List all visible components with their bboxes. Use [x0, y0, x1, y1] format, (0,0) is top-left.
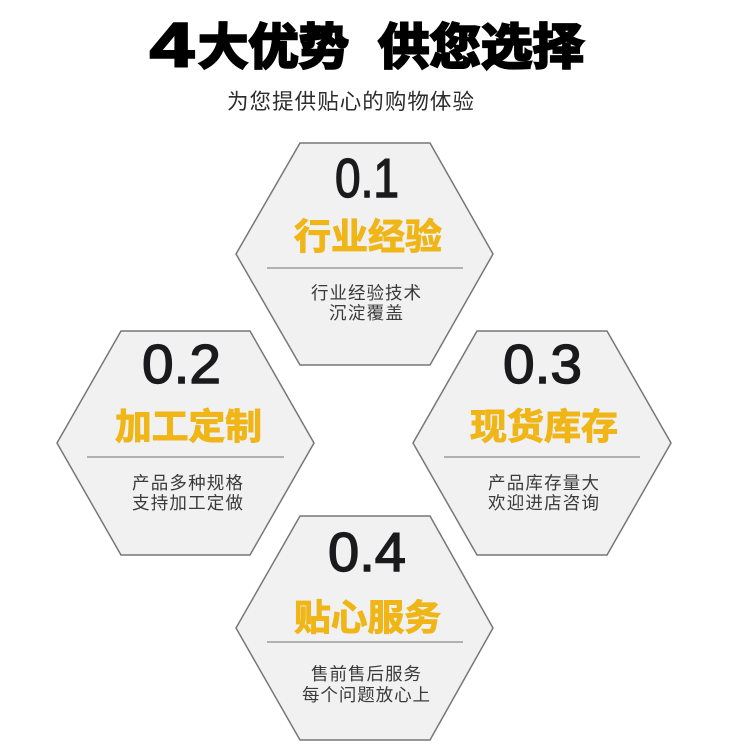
hexagon 2 [57, 331, 314, 555]
number 0.3: 0.3 [503, 333, 582, 395]
description 2: 支持加工定做 [132, 493, 243, 513]
panel: 0.2 customization [57, 331, 314, 555]
description 3 [488, 473, 599, 513]
heading 现货库存: 现货库存 [470, 406, 618, 447]
description 4: 售前售后服务 [311, 664, 421, 684]
title: 4 [150, 11, 195, 80]
title: 大优势 [198, 21, 349, 75]
number 0.2: 0.2 [142, 333, 221, 395]
hexagon 3 [413, 331, 671, 555]
heading 加工定制: 加工定制 [115, 406, 262, 447]
heading 贴心服务: 贴心服务 [294, 597, 441, 638]
panel: 0.1 industry experience [236, 143, 493, 365]
title [150, 11, 584, 80]
number 0.1: 0.1 [335, 147, 399, 209]
description 4: 每个问题放心上 [302, 685, 430, 705]
heading 行业经验: 行业经验 [294, 216, 442, 257]
subtitle: 为您提供贴心的购物体验 [227, 90, 474, 114]
number 0.4: 0.4 [328, 521, 406, 583]
description 2 [132, 473, 244, 513]
title: 供您选择 [378, 21, 584, 75]
panel: 0.4 caring service [236, 516, 493, 740]
description 3: 欢迎进店咨询 [488, 493, 599, 513]
hexagon 4 [236, 516, 493, 740]
description 1: 沉淀覆盖 [329, 303, 403, 323]
panel: 0.3 in stock [413, 331, 671, 555]
description 2: 产品多种规格 [132, 473, 244, 493]
hexagon 1 [236, 143, 493, 365]
description 1: 行业经验技术 [311, 283, 421, 303]
description 3: 产品库存量大 [488, 473, 599, 493]
description 1 [311, 283, 421, 323]
description 4 [302, 664, 430, 705]
